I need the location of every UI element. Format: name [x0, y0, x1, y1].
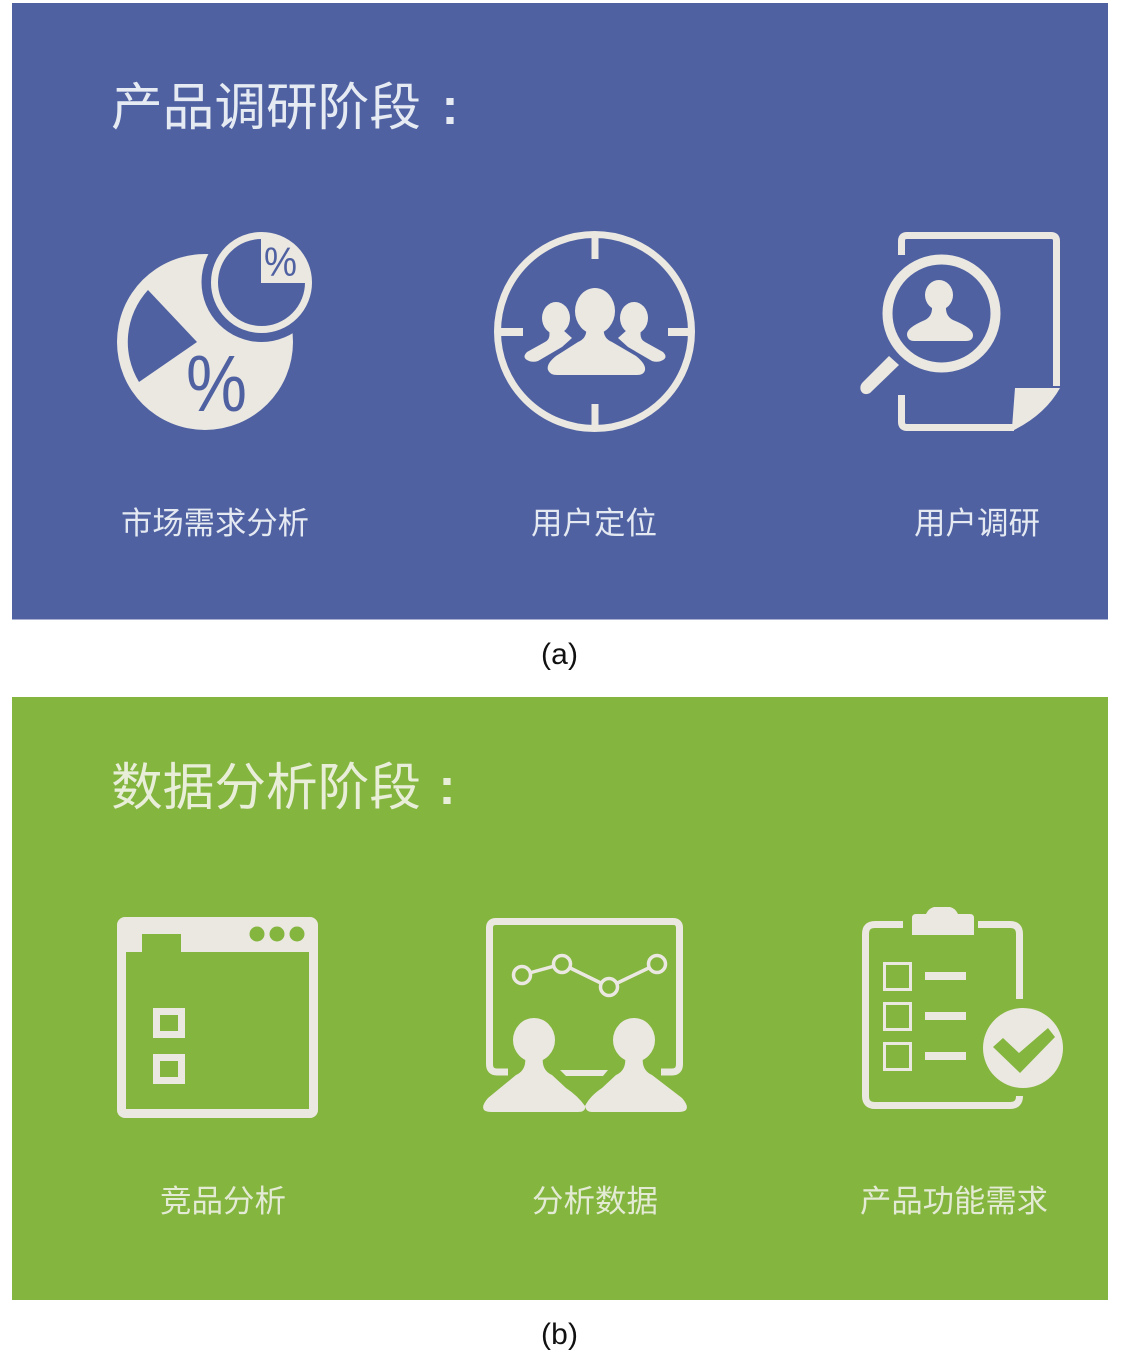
icon: pie chart with percent: % — [186, 339, 247, 428]
panel: product research stage — [12, 3, 1108, 620]
icon: board with line chart and people — [483, 922, 687, 1112]
label: competitor analysis: 竞品分析 — [160, 1184, 286, 1219]
heading: product research: 产品调研阶段 — [111, 79, 421, 136]
caption a: (a) — [541, 638, 578, 671]
heading: data analysis: 数据分析阶段 — [111, 759, 421, 816]
label: product feature requirements: 产品功能需求 — [860, 1184, 1048, 1219]
icon: document with magnifier — [860, 236, 1060, 431]
heading: data analysis: : — [439, 758, 455, 815]
panel: data analysis stage — [12, 697, 1108, 1300]
label: market demand: 市场需求分析 — [121, 506, 309, 541]
icon: pie chart with percent — [117, 222, 322, 430]
icon: browser window — [117, 917, 318, 1118]
icon: pie chart with percent: % — [264, 239, 297, 285]
icon: target with people — [498, 234, 692, 428]
caption b: (b) — [541, 1318, 578, 1351]
icon: clipboard with check — [866, 907, 1063, 1106]
label: user positioning: 用户定位 — [531, 506, 657, 541]
heading: product research: : — [442, 78, 458, 135]
label: analyse data: 分析数据 — [532, 1184, 658, 1219]
label: user research: 用户调研 — [914, 506, 1040, 541]
